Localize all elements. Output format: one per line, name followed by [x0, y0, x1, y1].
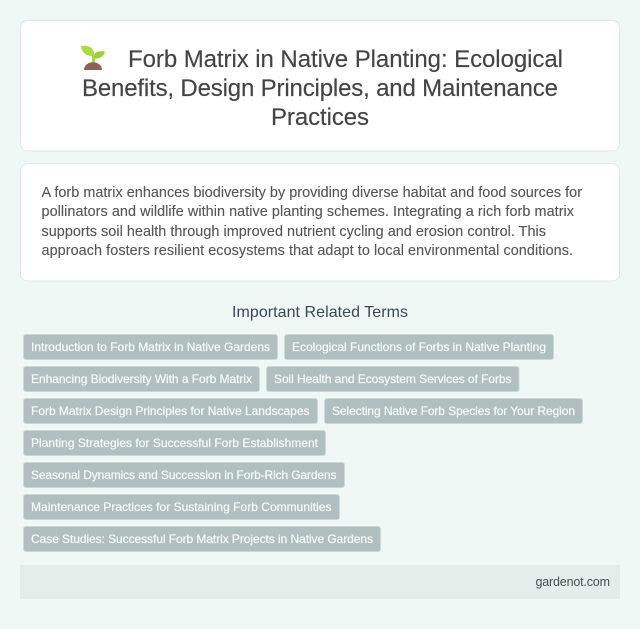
tag: case studies: [24, 526, 380, 552]
tag: soil health: [266, 366, 519, 392]
tag: ecological functions: Ecological Functions of Forbs in Native Planting: [292, 340, 546, 354]
panel: footer: [20, 565, 620, 599]
tag: ecological functions: [284, 334, 554, 360]
text block: summary: [42, 185, 582, 259]
heading: title: Forb Matrix in Native Planting: Ecological: [128, 46, 563, 73]
heading: important related terms: Important Related Terms: [232, 304, 408, 321]
tag: introduction: [24, 334, 278, 360]
panel: summary card: [20, 164, 620, 281]
tag: seasonal dynamics: [24, 462, 344, 488]
tag: seasonal dynamics: Seasonal Dynamics and Succession in Forb-Rich Gardens: [31, 468, 336, 482]
heading: title: Practices: [271, 104, 369, 131]
tag: case studies: Case Studies: Successful Forb Matrix Projects in Native Gardens: [31, 532, 373, 546]
tag: soil health: Soil Health and Ecosystem Services of Forbs: [274, 372, 512, 386]
text block: summary: approach fosters resilient ecosystems that adapt to local environmental conditions.: [42, 243, 573, 259]
tag: introduction: Introduction to Forb Matrix in Native Gardens: [31, 340, 270, 354]
tag: planting strategies: Planting Strategies for Successful Forb Establishment: [31, 436, 319, 450]
tag: selecting species: [324, 398, 582, 424]
text block: summary: pollinators and wildlife within native planting schemes. Integrating a rich forb matrix: [42, 204, 575, 220]
panel: title card: [20, 20, 620, 151]
heading: title: Benefits, Design Principles, and Maintenance: [82, 75, 558, 102]
text block: summary: supports soil health through improved nutrient cycling and erosion control. This: [42, 224, 546, 240]
text block: summary: A forb matrix enhances biodiversity by providing diverse habitat and food sources for: [42, 185, 582, 201]
tag: selecting species: Selecting Native Forb Species for Your Region: [332, 404, 575, 418]
tag: maintenance practices: [24, 494, 340, 520]
text: source: gardenot.com: [536, 575, 610, 589]
tag: planting strategies: [24, 430, 326, 456]
tag: design principles: [24, 398, 318, 424]
heading: title: [82, 46, 563, 131]
icon: sprout: [81, 46, 105, 70]
tag: enhancing biodiversity: Enhancing Biodiversity With a Forb Matrix: [31, 372, 252, 386]
tag: maintenance practices: Maintenance Practices for Sustaining Forb Communities: [31, 500, 332, 514]
tag: design principles: Forb Matrix Design Principles for Native Landscapes: [31, 404, 310, 418]
tag: enhancing biodiversity: [24, 366, 260, 392]
panel: related term tags: [24, 334, 582, 552]
